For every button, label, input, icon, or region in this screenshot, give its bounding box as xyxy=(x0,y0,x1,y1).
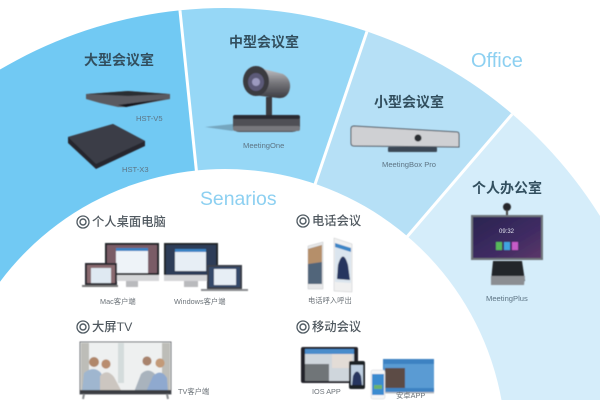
sector: personal office xyxy=(408,115,600,400)
label: MeetingBox Pro: MeetingBox Pro xyxy=(382,160,436,169)
icon: Mac and Windows computers xyxy=(82,243,248,291)
icon: bullet desktop xyxy=(77,216,89,228)
sector: large meeting room xyxy=(0,10,195,282)
sector: small meeting room xyxy=(316,32,512,236)
icon: MeetingOne camera xyxy=(205,66,300,132)
label: Android app: 安卓APP xyxy=(396,391,425,400)
label: phone call in/out: 电话呼入呼出 xyxy=(308,296,352,305)
sector: medium meeting room xyxy=(180,8,367,184)
label: TV client: TV客户端 xyxy=(178,387,209,396)
label: MeetingPlus: MeetingPlus xyxy=(486,294,528,303)
icon: phones xyxy=(308,238,352,292)
icon: mobile devices xyxy=(301,347,434,399)
icon: MeetingBox Pro xyxy=(351,126,459,152)
icon: MeetingPlus terminal xyxy=(471,203,543,285)
label: Mac client: Mac客户端 xyxy=(100,297,136,306)
heading: Office: Office xyxy=(471,50,523,72)
heading: personal office: 个人办公室 xyxy=(472,180,542,196)
heading: Senarios: Senarios xyxy=(200,188,277,210)
icon: HST-X3 device xyxy=(68,124,145,169)
icon: bullet TV xyxy=(77,321,89,333)
label: Windows client: Windows客户端 xyxy=(174,297,226,306)
heading: medium room: 中型会议室 xyxy=(229,34,299,50)
icon: bullet mobile xyxy=(297,321,309,333)
icon: HST-V5 device xyxy=(86,91,170,107)
heading: mobile conference: 移动会议 xyxy=(312,319,362,334)
heading: small room: 小型会议室 xyxy=(374,94,444,110)
heading: big screen TV: 大屏TV xyxy=(92,320,133,334)
label: HST-V5: HST-V5 xyxy=(136,114,163,123)
panel: scenarios white circle xyxy=(0,169,502,400)
icon: TV with people xyxy=(80,342,171,399)
icon: bullet phone xyxy=(297,215,309,227)
heading: large room: 大型会议室 xyxy=(84,52,154,68)
heading: desktop: 个人桌面电脑 xyxy=(92,214,166,229)
label: HST-X3: HST-X3 xyxy=(122,165,149,174)
label: 09:32 clock: 09:32 xyxy=(499,229,515,235)
label: MeetingOne: MeetingOne xyxy=(243,141,284,150)
heading: phone conference: 电话会议 xyxy=(312,213,362,228)
label: iOS app: IOS APP xyxy=(312,387,341,396)
